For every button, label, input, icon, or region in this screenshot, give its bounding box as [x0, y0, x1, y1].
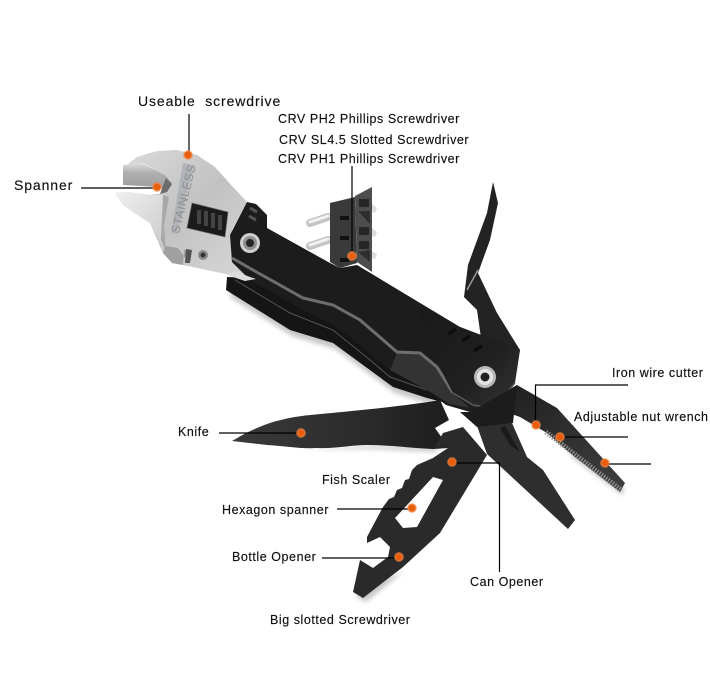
- label: Can Opener: Can Opener: [470, 575, 544, 589]
- label: Knife: [178, 425, 305, 439]
- handle slots: [448, 329, 482, 351]
- label: Bottle Opener: Bottle Opener: [232, 550, 316, 564]
- hook blade: [464, 182, 520, 372]
- label: Iron wire cutter: Iron wire cutter: [612, 366, 703, 380]
- label: Iron wire cutter: [532, 366, 703, 429]
- label: Adjustable nut wrench: Adjustable nut wrench: [574, 410, 709, 424]
- label: CRV SL4.5 Slotted Screwdriver: CRV SL4.5 Slotted Screwdriver: [279, 133, 469, 147]
- slider detail: [163, 246, 192, 265]
- label: Bottle Opener: [232, 550, 403, 564]
- label: Fish Scaler: Fish Scaler: [322, 473, 391, 487]
- engraved STAINLESS band: [171, 163, 194, 234]
- lower jaw highlight: [115, 192, 167, 253]
- bit shafts: [310, 217, 328, 246]
- adjustable wrench head: STAINLESS: [168, 163, 199, 235]
- pivot screw: [474, 366, 496, 388]
- back handle: [226, 277, 470, 404]
- multi-tool illustration: [115, 150, 625, 602]
- label: Can Opener: [448, 458, 544, 589]
- bevel strip: [232, 258, 453, 393]
- screwdriver bit holder: [310, 187, 377, 272]
- label: Hexagon spanner: Hexagon spanner: [222, 503, 329, 517]
- plier right jaw: [500, 385, 625, 492]
- plier left jaw: [477, 423, 575, 529]
- knife blade: [232, 400, 449, 449]
- label: Adjustable nut wrench: [556, 410, 709, 441]
- callout: unlabelled plier tip: [601, 459, 651, 467]
- head plate: [420, 308, 520, 410]
- label: Spanner: Spanner: [14, 177, 73, 193]
- multi-function tool blade: [353, 427, 487, 598]
- label: Useable screwdrive: [138, 93, 281, 159]
- upper jaw face: [123, 163, 172, 190]
- label: Spanner: [14, 177, 161, 193]
- lower plate near head: [390, 353, 470, 408]
- front handle: [227, 202, 520, 412]
- wire cutter serrated edge: [546, 432, 621, 490]
- label: Knife: Knife: [178, 425, 209, 439]
- size scale window: [187, 203, 228, 237]
- soft drop shadow: [229, 288, 625, 602]
- label: Hexagon spanner: [222, 503, 416, 517]
- handle screw: [240, 233, 260, 253]
- adjustable wrench head: [115, 150, 253, 280]
- label: Useable screwdrive: Useable screwdrive: [138, 93, 281, 109]
- holder body: [330, 197, 357, 268]
- label: Big slotted Screwdriver: Big slotted Screwdriver: [270, 613, 410, 627]
- label: CRV PH1 Phillips Screwdriver: [278, 152, 460, 260]
- label: CRV PH2 Phillips Screwdriver: CRV PH2 Phillips Screwdriver: [278, 112, 460, 126]
- handle cap slots: [249, 208, 257, 220]
- label: CRV PH1 Phillips Screwdriver: CRV PH1 Phillips Screwdriver: [278, 152, 460, 166]
